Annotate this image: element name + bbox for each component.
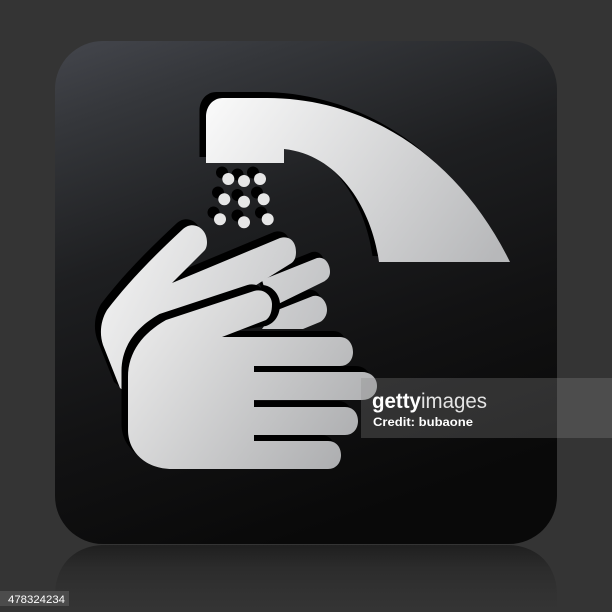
watermark credit text: Credit: bubaone: [373, 415, 473, 429]
icon: water drops: [208, 166, 274, 228]
black rounded square button: [55, 41, 557, 544]
watermark logo text: gettyimages: [372, 390, 487, 413]
icon: faucet: [200, 92, 510, 262]
icon: back hand: [95, 219, 330, 400]
image id label: [0, 591, 69, 606]
reflection of the button: [55, 545, 557, 612]
watermark band: [361, 378, 612, 438]
icon: front hand: [122, 284, 377, 469]
image id label: 478324234: [8, 594, 65, 606]
